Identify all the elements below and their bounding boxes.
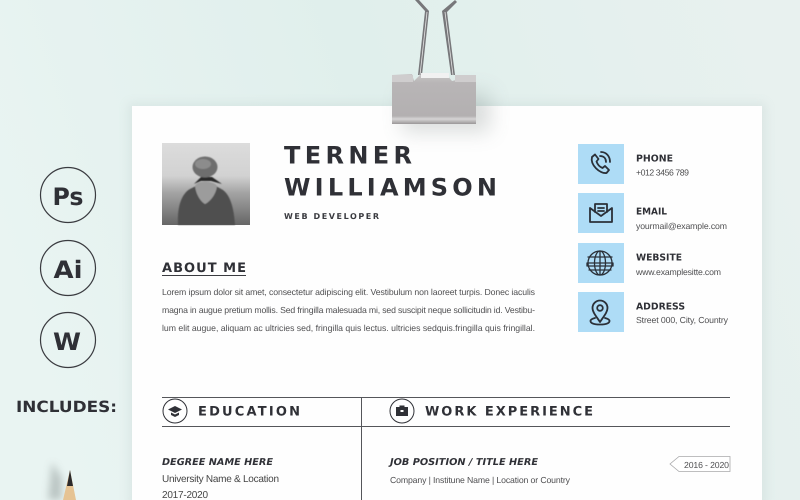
text block: work entry: Company | Institune Name | Location or Country — [390, 475, 571, 485]
icon: word badge: W — [53, 328, 81, 356]
contact: email: yourmail@example.com — [636, 221, 727, 231]
icon: illustrator badge — [40, 240, 96, 296]
contact: address — [578, 292, 729, 332]
panel: resume sheet — [128, 103, 766, 500]
title: name — [284, 142, 497, 202]
text block: about me: Lorem ipsum dolor sit amet, consectetur adipiscing elit. Vestibulum non laoreet turpis. Donec iaculis — [162, 287, 536, 297]
icon: map pin — [590, 301, 610, 324]
icon: graduation cap — [163, 399, 187, 423]
heading: includes: INCLUDES: — [16, 398, 117, 416]
contact: website — [578, 243, 721, 283]
contact: address: Street 000, City, Country — [636, 315, 729, 325]
text block: work entry — [388, 457, 571, 485]
job title: WEB DEVELOPER — [284, 212, 379, 221]
panel: contact list — [578, 144, 729, 332]
icon: phone — [592, 152, 610, 173]
contact: phone — [578, 144, 689, 184]
text block: education entry: University Name & Location — [162, 474, 279, 485]
contact: phone: +012 3456 789 — [636, 168, 689, 178]
text block: about me — [162, 287, 536, 333]
icon: globe — [587, 251, 613, 275]
icon: briefcase — [390, 399, 414, 423]
icon: photoshop badge — [40, 168, 96, 222]
heading: about me: ABOUT ME — [162, 261, 246, 276]
text block: about me: lum elit augue, aliquam ac ultricies sed, fringilla quis lectus. ultricies sedquis.fringilla quis fringillal. — [162, 323, 535, 333]
text block: work entry: JOB POSITION / TITLE HERE — [388, 457, 539, 468]
heading: education — [163, 399, 300, 423]
icon: word badge — [40, 312, 96, 368]
icon: pencil — [48, 462, 76, 500]
date tag: 2016 - 2020 — [684, 460, 729, 470]
contact: phone: PHONE — [636, 154, 673, 164]
contact: website: www.examplesitte.com — [635, 267, 721, 277]
icon: binder clip — [392, 0, 490, 132]
date tag — [670, 456, 730, 472]
title: name: TERNER — [284, 142, 412, 170]
photo: person from behind — [162, 143, 250, 225]
icon: envelope — [590, 204, 612, 222]
text block: education entry — [162, 457, 279, 500]
contact: email: EMAIL — [636, 206, 667, 218]
text block: education entry: DEGREE NAME HERE — [162, 457, 274, 468]
contact: website: WEBSITE — [636, 252, 682, 264]
heading: work experience: WORK EXPERIENCE — [425, 404, 593, 420]
text block: about me: magna in augue pretium mollis. Sed fringilla malesuada mi, sed suscipit neque sollicitudin id. Vestibu- — [162, 305, 535, 315]
icon: photoshop badge: Ps — [52, 183, 84, 211]
heading: education: EDUCATION — [198, 404, 300, 420]
heading: work experience — [390, 399, 593, 423]
title: name: WILLIAMSON — [284, 174, 497, 202]
contact: address: ADDRESS — [636, 302, 685, 312]
icon: illustrator badge: Ai — [54, 256, 82, 284]
panel: section headers — [162, 397, 730, 500]
contact: email — [578, 193, 727, 233]
